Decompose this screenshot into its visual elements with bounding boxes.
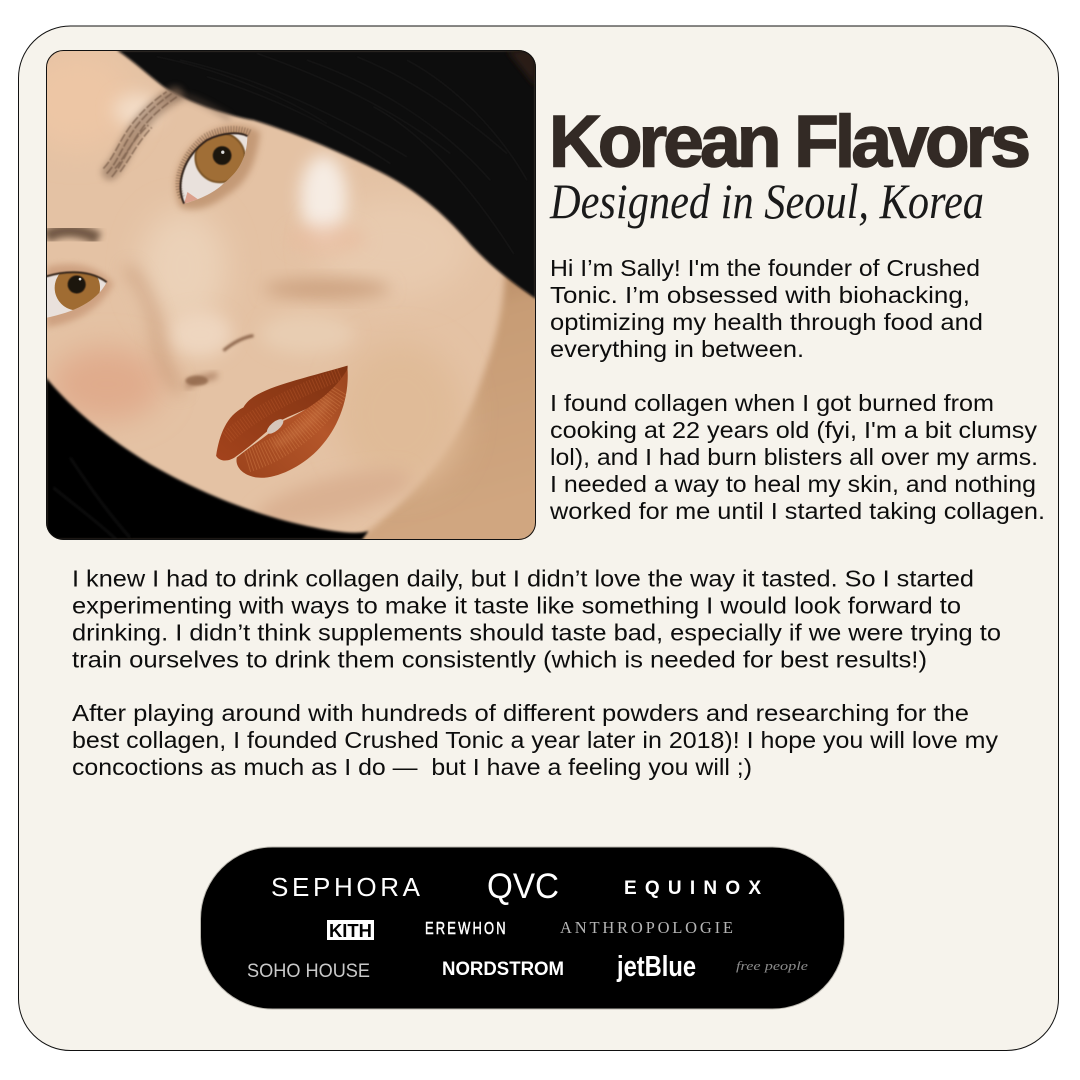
founding paragraph: concoctions as much as I do — but I have a feeling you will ;) xyxy=(72,754,752,780)
logo: Equinox: EQUINOX xyxy=(624,878,761,899)
collagen paragraph xyxy=(549,390,1045,524)
intro paragraph: Hi I’m Sally! I'm the founder of Crushed xyxy=(550,255,980,281)
logo: Kith: KITH xyxy=(329,921,372,941)
collagen paragraph: cooking at 22 years old (fyi, I'm a bit clumsy xyxy=(550,417,1037,443)
logo: Soho House: SOHO HOUSE xyxy=(247,960,370,982)
photo: close-up portrait of woman with rust lipstick xyxy=(46,50,536,540)
story paragraph: experimenting with ways to make it taste like something I would look forward to xyxy=(72,592,961,618)
logo: Nordstrom: NORDSTROM xyxy=(442,958,564,980)
collagen paragraph: I needed a way to heal my skin, and nothing xyxy=(550,471,1036,497)
right eye xyxy=(175,126,252,204)
intro paragraph xyxy=(550,255,983,362)
skin shading xyxy=(362,273,536,540)
founding paragraph: best collagen, I founded Crushed Tonic a year later in 2018)! I hope you will love my xyxy=(72,727,998,753)
retailer logos panel xyxy=(200,847,844,1009)
founding paragraph xyxy=(72,700,998,780)
story paragraph: drinking. I didn’t think supplements should taste bad, especially if we were trying to xyxy=(72,620,1001,646)
collagen paragraph: worked for me until I started taking collagen. xyxy=(549,498,1045,524)
lower-left hair xyxy=(46,377,369,540)
eyebrow right xyxy=(103,92,177,177)
nostril xyxy=(223,336,253,351)
intro paragraph: optimizing my health through food and xyxy=(550,309,983,335)
top hair xyxy=(117,50,536,299)
story paragraph: I knew I had to drink collagen daily, but I didn’t love the way it tasted. So I started xyxy=(72,566,974,592)
lips xyxy=(216,366,348,478)
collagen paragraph: lol), and I had burn blisters all over my arms. xyxy=(550,444,1038,470)
intro paragraph: everything in between. xyxy=(550,336,804,362)
founding paragraph: After playing around with hundreds of different powders and researching for the xyxy=(72,700,969,726)
eyebrow left xyxy=(46,231,98,239)
eye socket shading xyxy=(176,125,260,209)
subtitle: Designed in Seoul, Korea xyxy=(549,173,984,229)
logo: jetBlue: jetBlue xyxy=(616,951,696,983)
logo: Anthropologie: ANTHROPOLOGIE xyxy=(560,918,733,937)
logo: Free People: free people xyxy=(736,958,808,973)
logo: QVC: QVC xyxy=(487,867,559,906)
intro paragraph: Tonic. I’m obsessed with biohacking, xyxy=(550,282,970,308)
story paragraph xyxy=(72,566,1001,672)
collagen paragraph: I found collagen when I got burned from xyxy=(550,390,994,416)
logo: Sephora: SEPHORA xyxy=(271,872,421,902)
logo: Erewhon: EREWHON xyxy=(425,919,508,939)
left eye xyxy=(47,270,108,318)
photo frame xyxy=(46,50,536,540)
story paragraph: train ourselves to drink them consistently (which is needed for best results!) xyxy=(72,646,927,672)
title: Korean Flavors xyxy=(549,102,1031,182)
